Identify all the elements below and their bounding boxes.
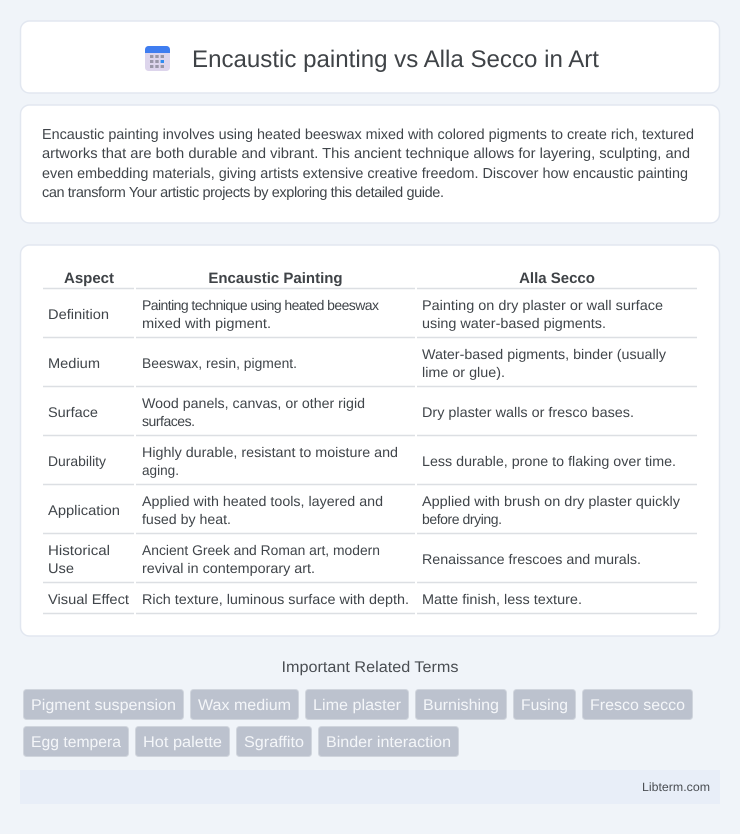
title: Encaustic painting vs Alla Secco in Art [192, 46, 599, 73]
row: visual effect: Matte finish, less texture. [422, 591, 582, 607]
tag: pigment suspension [24, 690, 184, 720]
tag: hot palette: Hot palette [143, 734, 222, 751]
row: medium: Water-based pigments, binder (usually [422, 346, 666, 362]
tag: binder interaction: Binder interaction [326, 734, 451, 751]
tag: egg tempera: Egg tempera [31, 734, 121, 751]
row: surface: Dry plaster walls or fresco bases. [422, 404, 634, 420]
row: application: fused by heat. [142, 511, 231, 527]
footer credit: Libterm.com [642, 780, 710, 794]
row: durability: Less durable, prone to flaking over time. [422, 453, 676, 469]
tag: lime plaster: Lime plaster [313, 697, 401, 714]
row: definition: Painting on dry plaster or wall surface [422, 297, 663, 313]
row: definition: mixed with pigment. [142, 315, 271, 331]
row: historical use [48, 542, 641, 576]
row: visual effect: Visual Effect [48, 591, 129, 607]
row: historical use: Ancient Greek and Roman art, modern [142, 542, 380, 558]
icon: calendar grid [145, 46, 170, 71]
table header [64, 270, 595, 287]
tag: fresco secco [582, 690, 692, 720]
heading: related terms: Important Related Terms [282, 659, 459, 676]
row: durability: aging. [142, 462, 179, 478]
footer bar [20, 770, 720, 804]
row: application [48, 493, 680, 527]
tag: lime plaster [306, 690, 408, 720]
tag: egg tempera [24, 726, 128, 756]
row: definition: Definition [48, 306, 109, 322]
row: durability: Durability [48, 453, 106, 469]
tag: burnishing [416, 690, 506, 720]
tag: fusing: Fusing [521, 697, 568, 714]
tag: binder interaction [318, 726, 458, 756]
row: durability [48, 444, 676, 478]
row: definition: using water-based pigments. [422, 315, 606, 331]
row: application: before drying. [422, 511, 502, 527]
row: surface [48, 395, 634, 429]
row: visual effect [48, 591, 582, 607]
row: medium: Medium [48, 355, 100, 371]
row: definition: Painting technique using heated beeswax [142, 297, 379, 313]
row: surface: Wood panels, canvas, or other rigid [142, 395, 365, 411]
row: application: Application [48, 502, 120, 518]
tag: fusing [514, 690, 576, 720]
row: historical use: Historical [48, 542, 110, 558]
tag: sgraffito [236, 726, 312, 756]
intro text: even embedding materials, giving artists extensive creative freedom. Discover how encaustic painting [42, 166, 688, 182]
tag: burnishing: Burnishing [423, 697, 499, 714]
row: visual effect: Rich texture, luminous surface with depth. [142, 591, 409, 607]
tag: wax medium [190, 690, 298, 720]
tag: fresco secco: Fresco secco [590, 697, 685, 714]
row: surface: surfaces. [142, 413, 195, 429]
row: medium: lime or glue). [422, 364, 505, 380]
intro text: can transform Your artistic projects by exploring this detailed guide. [42, 185, 444, 201]
related term tags [24, 690, 692, 756]
panel: comparison table [20, 245, 720, 636]
panel: introduction [20, 105, 720, 223]
tag: pigment suspension: Pigment suspension [31, 697, 176, 714]
intro text: Encaustic painting involves using heated beeswax mixed with colored pigments to create rich, textured [42, 127, 694, 143]
intro text [42, 127, 694, 201]
row: application: Applied with heated tools, layered and [142, 493, 383, 509]
table header: Aspect [64, 270, 114, 287]
row: durability: Highly durable, resistant to moisture and [142, 444, 398, 460]
row: definition [48, 297, 663, 331]
title panel [20, 21, 720, 93]
table header: Alla Secco [519, 270, 595, 287]
row: medium: Beeswax, resin, pigment. [142, 355, 297, 371]
row: historical use: Renaissance frescoes and murals. [422, 551, 641, 567]
row: medium [48, 346, 666, 380]
tag: hot palette [136, 726, 230, 756]
row: application: Applied with brush on dry plaster quickly [422, 493, 680, 509]
tag: wax medium: Wax medium [198, 697, 291, 714]
tag: sgraffito: Sgraffito [244, 734, 304, 751]
row: historical use: revival in contemporary art. [142, 560, 315, 576]
row: surface: Surface [48, 404, 98, 420]
intro text: artworks that are both durable and vibrant. This ancient technique allows for layering, sculpting, and [42, 146, 690, 162]
table header: Encaustic Painting [208, 270, 343, 287]
row: historical use: Use [48, 560, 74, 576]
